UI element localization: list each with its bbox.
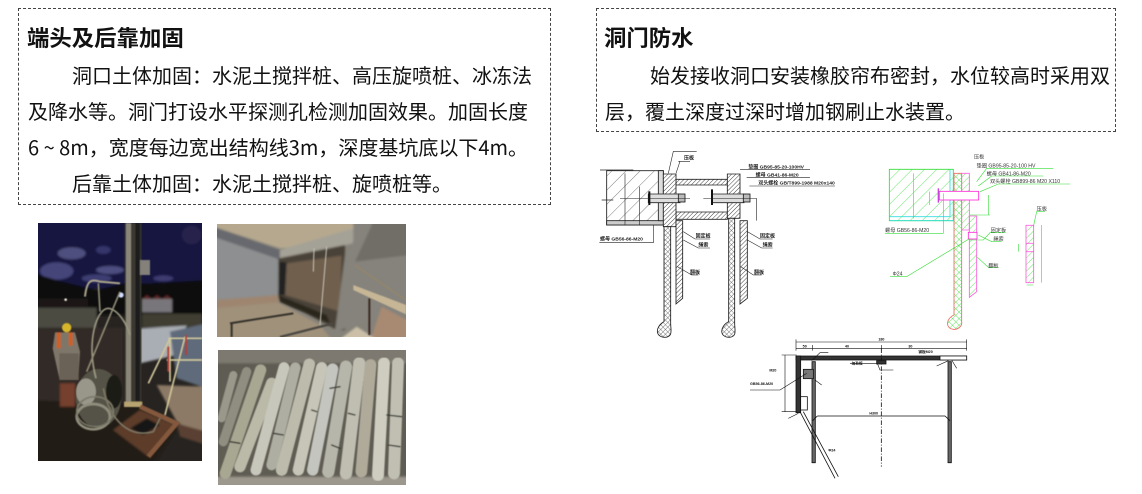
worker	[53, 332, 80, 378]
label: washer: 垫圈 GB95-85-20-100HV	[748, 163, 805, 170]
photo: excavation pit wall	[213, 222, 410, 342]
text block: waterproofing description	[605, 60, 1110, 125]
railing	[148, 337, 202, 415]
label: washer: 垫圈 GB95-85-20-100 HV	[977, 162, 1036, 170]
concrete wall	[607, 171, 663, 225]
dimension lines	[599, 151, 835, 243]
panel: portal waterproofing text	[596, 8, 1116, 132]
heading: end reinforcement: 端头及后靠加固	[27, 21, 184, 53]
label: nut: 螺母 GB41-86-M20	[987, 169, 1031, 177]
steel sleeve	[676, 179, 727, 219]
text block: end reinforcement description: 后靠土体加固：水泥土搅拌桩、旋喷桩等。	[72, 168, 452, 197]
label: nut anchor: 螺母 GB56-86-M20	[600, 236, 643, 243]
flaps	[657, 227, 671, 337]
bolts	[648, 194, 744, 203]
label: middle span: 40	[845, 344, 849, 348]
label: fixing plate right: 固定板	[760, 232, 775, 239]
text block: end reinforcement description: 洞口土体加固：水泥土搅拌桩、高压旋喷桩、冰冻法	[72, 60, 532, 89]
label: center bottom: H300	[869, 412, 878, 416]
label: fixing plate: 固定板	[991, 226, 1006, 234]
label: total width: 180	[878, 338, 884, 342]
label: section note: GB56-86-M20	[750, 382, 773, 386]
label: strut: Φ24	[828, 449, 836, 453]
label: flap left: 翻板	[690, 269, 700, 276]
text block: end reinforcement description: 6 ~ 8m，宽度每边宽出结构线3m，深度基坑底以下4m。	[28, 132, 528, 161]
label: plate: 压板	[1037, 205, 1047, 213]
technical drawing: portal ring layout	[750, 338, 967, 478]
label: anchor nut: 螺母 GB56-86-M20	[885, 226, 929, 234]
hoses	[92, 308, 130, 378]
label: rope: 绳索	[993, 235, 1004, 243]
label: rubber strip right: 绳索	[763, 242, 773, 249]
text block: end reinforcement description	[28, 60, 532, 197]
label: flap: 翻板	[988, 261, 999, 269]
label: diameter: Φ24	[893, 271, 903, 277]
label: stud: 双头螺栓 GB899-86 M20 X110	[990, 177, 1060, 185]
cable coil	[76, 369, 121, 428]
label: rubber strip left: 绳索	[698, 242, 708, 249]
photo: night drilling rig	[33, 218, 207, 465]
label: pressure plate: 压板	[684, 154, 694, 161]
label: fixing plate left: 固定板	[696, 232, 711, 239]
label: flap right: 翻板	[754, 269, 764, 276]
label: right span: 30	[908, 344, 912, 348]
label: center note: 加劲板	[852, 361, 863, 366]
photo: drill core samples	[213, 347, 410, 487]
technical drawing: double-seal portal section	[599, 151, 835, 337]
rig mast	[125, 223, 141, 403]
panel: end reinforcement text	[18, 8, 551, 205]
technical drawing: colored single-seal section	[885, 153, 1070, 329]
text block: waterproofing description: 始发接收洞口安装橡胶帘布密封，水位较高时采用双	[650, 60, 1110, 89]
text block: end reinforcement description: 及降水等。洞门打设水平探测孔检测加固效果。加固长度	[28, 96, 528, 125]
label: nut: 螺母 GB41-86-M20	[756, 171, 799, 178]
label: left span: 50	[803, 344, 807, 348]
label: stud: 双头螺栓 GB/T899-1988 M20x140	[758, 180, 835, 187]
label: bolt note: M20	[769, 369, 776, 373]
heading: portal waterproofing: 洞门防水	[604, 21, 694, 53]
label: pressure plate: 压板	[974, 153, 984, 161]
text block: waterproofing description: 层，覆土深度过深时增加钢刷止水装置。	[605, 96, 965, 125]
label: annotation top right: 钢板M20	[918, 349, 933, 354]
